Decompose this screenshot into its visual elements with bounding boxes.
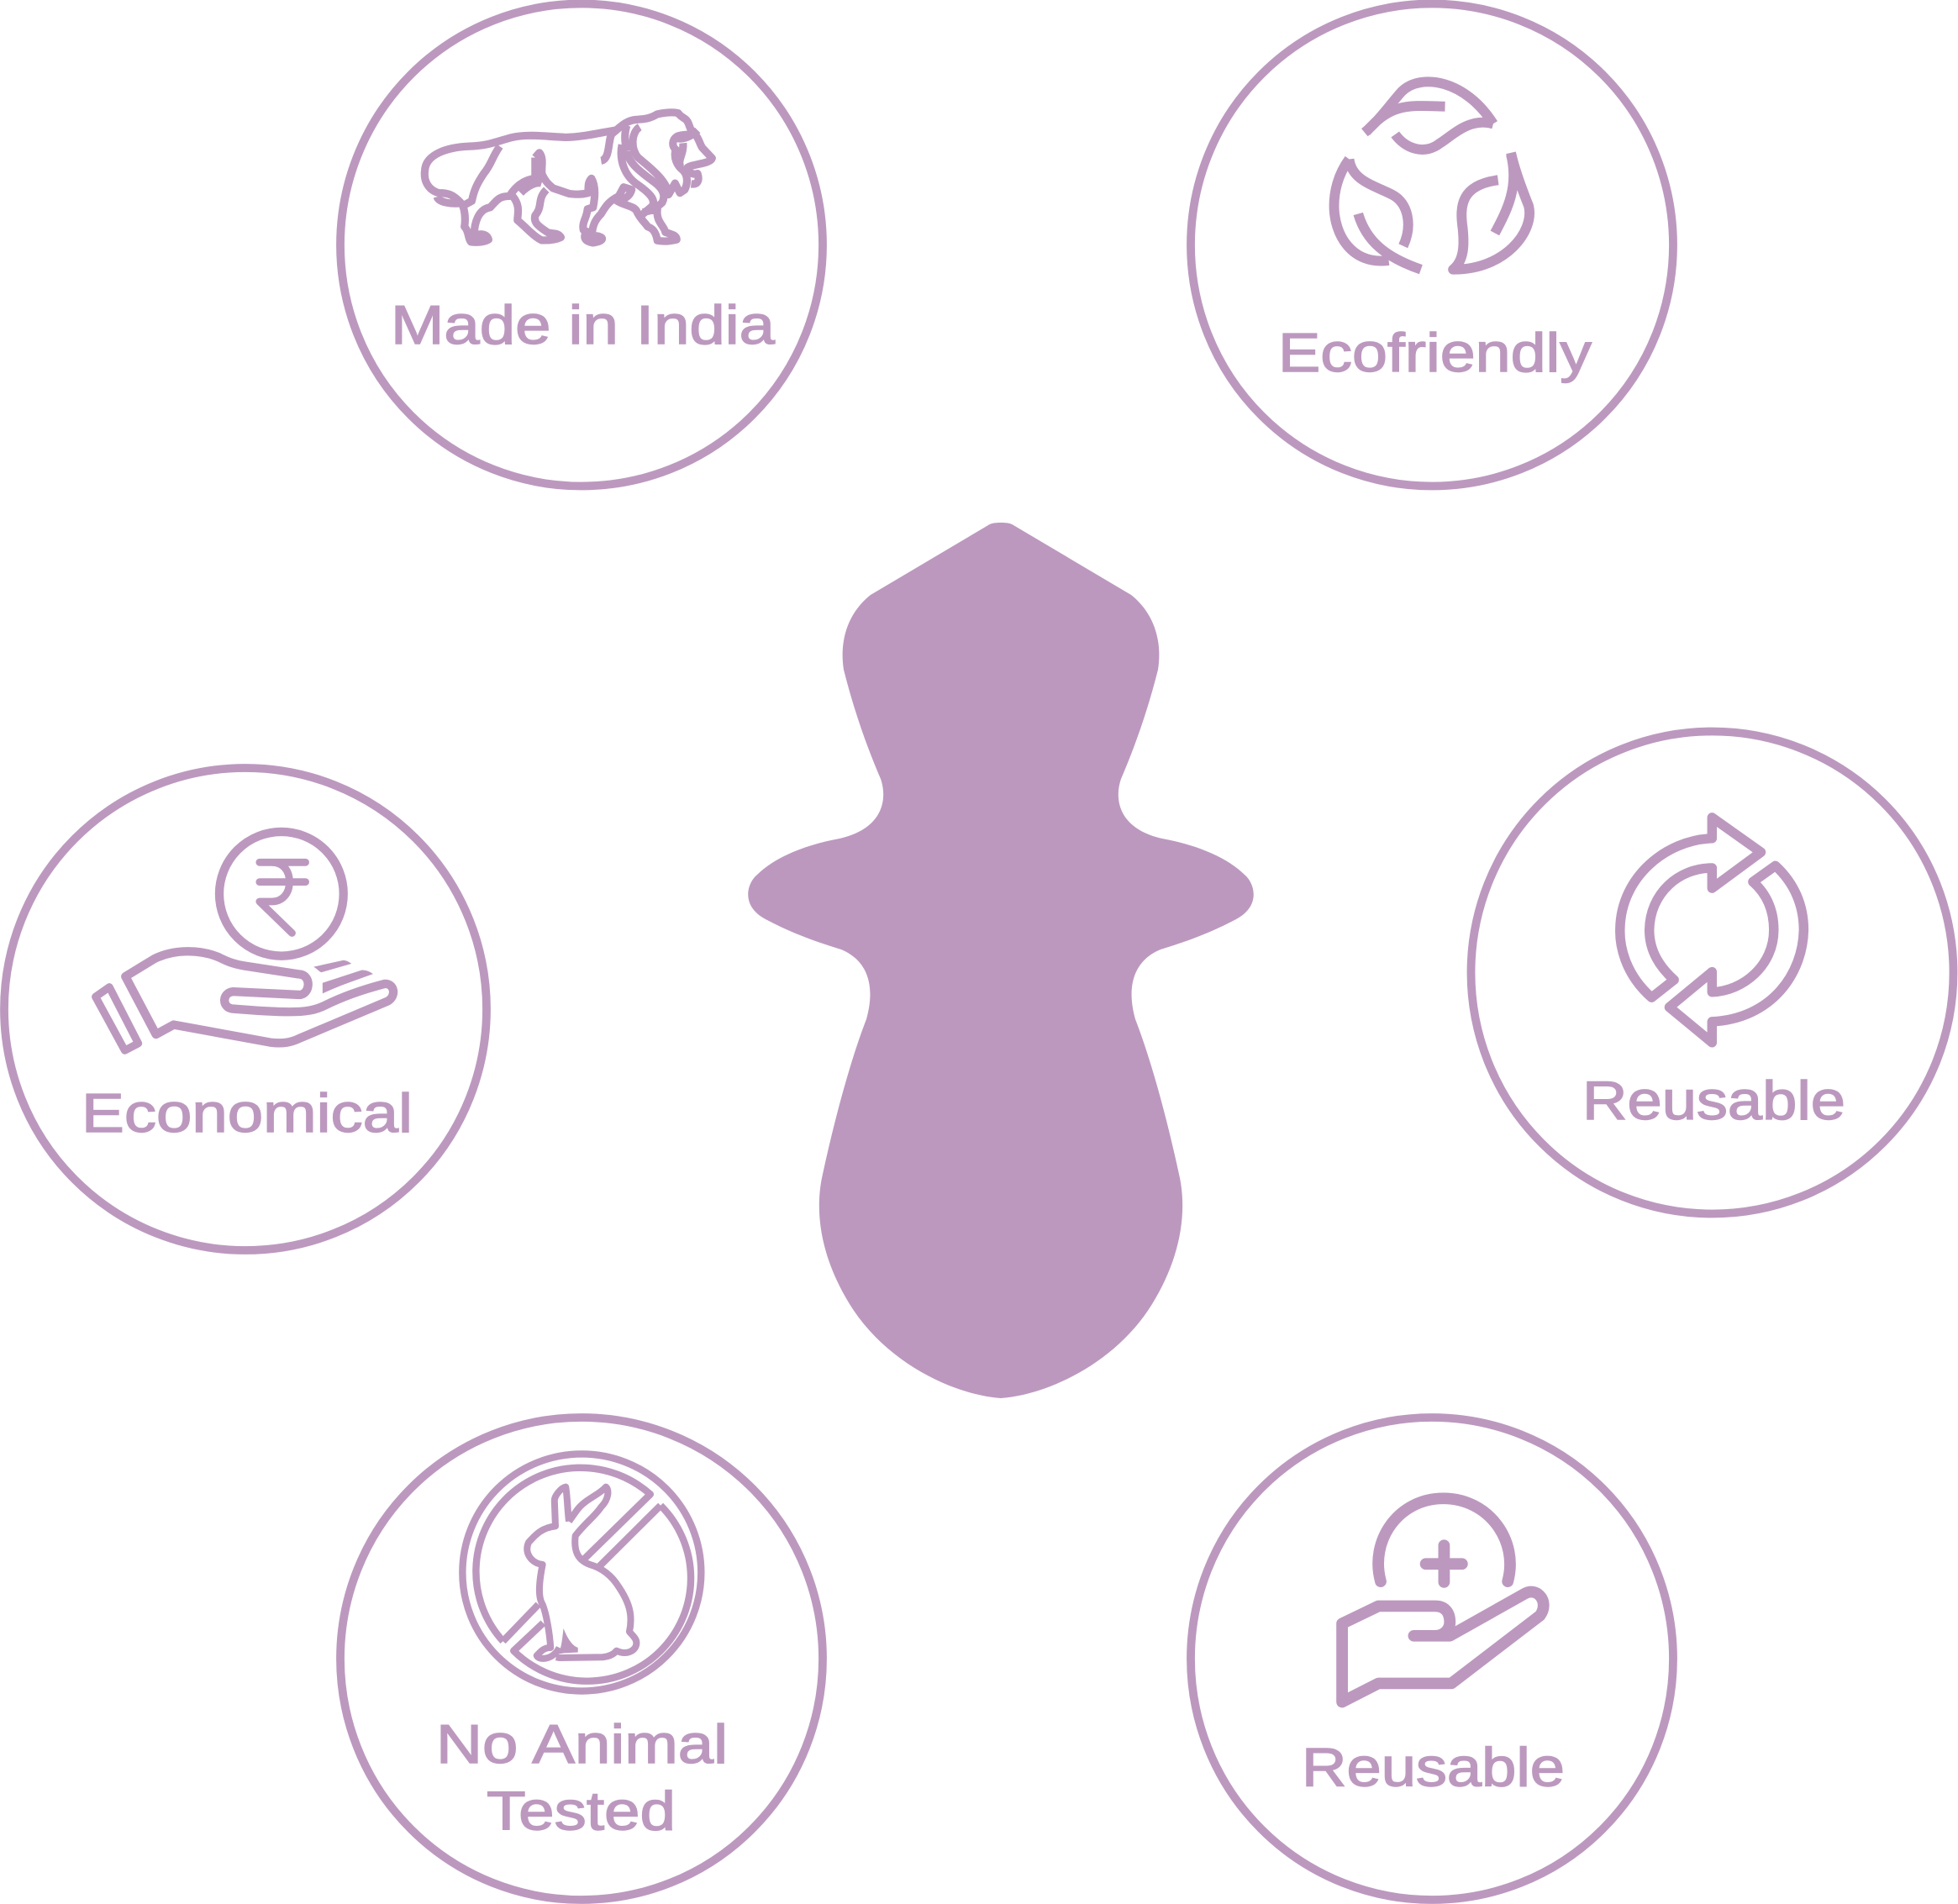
icon: crossed-out rabbit: [462, 1454, 701, 1691]
panel: Reusable (hand): [1191, 1417, 1673, 1900]
ring: Reusable arrows: [1471, 731, 1953, 1213]
label: Reusable: Reusable: [1582, 1070, 1845, 1131]
label: Reusable: Reusable: [1302, 1736, 1565, 1798]
icon: rupee coin over hand: [96, 832, 393, 1050]
label: No Animal Tested: Tested: [487, 1780, 676, 1842]
label: Economical: Economical: [82, 1082, 413, 1144]
panel: No Animal Tested: [340, 1417, 823, 1900]
ring: Ecofriendly: [1191, 3, 1673, 486]
ring: Economical: [4, 768, 487, 1250]
ring: Reusable hand: [1191, 1417, 1673, 1900]
icon: lion: [424, 113, 712, 243]
panel: Economical: [4, 768, 487, 1250]
icon: three leaves: [1334, 82, 1529, 270]
label: Made in India: Made in India: [391, 294, 776, 355]
label: No Animal Tested: [436, 1713, 728, 1842]
label: Ecofriendly: Ecofriendly: [1278, 322, 1592, 383]
panel: Reusable (arrows): [1471, 731, 1953, 1213]
ring: No Animal Tested: [340, 1417, 823, 1900]
label: No Animal Tested: No Animal: [436, 1713, 728, 1775]
icon: hand with plus: [1342, 1498, 1544, 1702]
central cloth pad shape: [748, 523, 1254, 1398]
panel: Made in India: [340, 3, 823, 486]
ring: Made in India: [340, 3, 823, 486]
panel: Ecofriendly: [1191, 3, 1673, 486]
icon: circular arrows: [1620, 818, 1803, 1043]
